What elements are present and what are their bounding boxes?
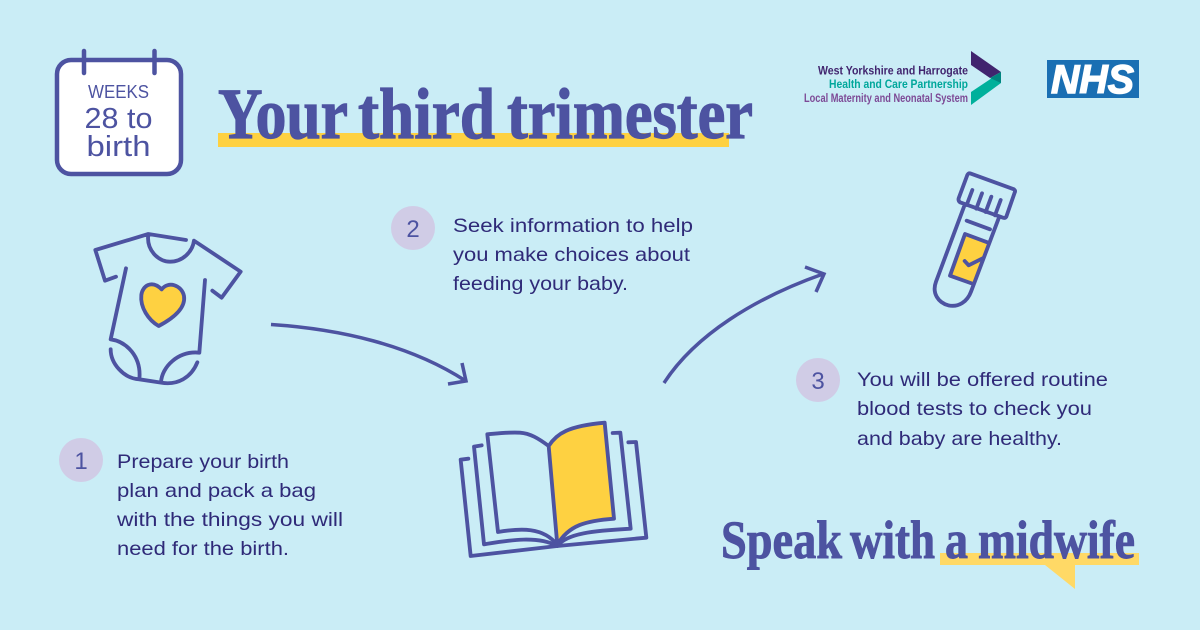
- step 1 text: [116, 451, 343, 560]
- icon: calendar with weeks 28 to birth: [57, 51, 181, 174]
- icon: blood test tube: [935, 173, 1015, 306]
- logo: NHS: NHS: [1051, 58, 1134, 102]
- callout: speak with a midwife: Speak: [721, 510, 842, 570]
- title with highlight: trimester: [507, 74, 753, 154]
- logo: West Yorkshire and Harrogate partnership: Local Maternity and Neonatal System: [804, 93, 968, 105]
- logo: West Yorkshire and Harrogate partnership: Health and Care Partnership: [829, 79, 968, 91]
- logo: West Yorkshire and Harrogate partnership: [804, 51, 1001, 105]
- icon: calendar with weeks 28 to birth: 28 to: [84, 103, 152, 135]
- step 3 text: You will be offered routine: [857, 369, 1108, 391]
- step 1: [59, 438, 343, 560]
- title with highlight: [218, 74, 753, 154]
- number badge 3: 3: [811, 368, 825, 395]
- step 1 text: plan and pack a bag: [117, 480, 316, 502]
- step 2 text: Seek information to help: [453, 215, 693, 237]
- step 2 text: [453, 215, 693, 295]
- logo: West Yorkshire and Harrogate partnership: West Yorkshire and Harrogate: [818, 66, 968, 78]
- callout: speak with a midwife: with: [850, 510, 935, 570]
- number badge 3: [796, 358, 840, 402]
- step 3 text: blood tests to check you: [857, 398, 1092, 420]
- number badge 1: [59, 438, 103, 482]
- number badge 1: 1: [74, 448, 88, 475]
- step 3: [796, 358, 1108, 450]
- callout: speak with a midwife: [721, 510, 1139, 589]
- step 1 text: with the things you will: [116, 509, 343, 531]
- callout: speak with a midwife: midwife: [978, 510, 1135, 570]
- step 1 text: Prepare your birth: [117, 451, 289, 473]
- icon: calendar with weeks 28 to birth: birth: [86, 131, 150, 163]
- number badge 2: 2: [406, 216, 420, 243]
- step 2: [391, 206, 693, 295]
- arrow: book to test tube: [664, 267, 824, 383]
- title with highlight: Your: [218, 74, 348, 154]
- step 3 text: and baby are healthy.: [857, 428, 1062, 450]
- title with highlight: third: [358, 74, 495, 154]
- step 1 text: need for the birth.: [117, 538, 289, 560]
- step 2 text: feeding your baby.: [453, 273, 628, 295]
- number badge 2: [391, 206, 435, 250]
- step 2 text: you make choices about: [453, 244, 691, 266]
- icon: calendar with weeks 28 to birth: WEEKS: [88, 82, 149, 102]
- arrow: onesie to book: [271, 324, 466, 384]
- step 3 text: [857, 369, 1108, 450]
- icon: open book: [461, 423, 646, 556]
- callout: speak with a midwife: a: [945, 510, 968, 570]
- icon: baby onesie with heart: [95, 234, 241, 383]
